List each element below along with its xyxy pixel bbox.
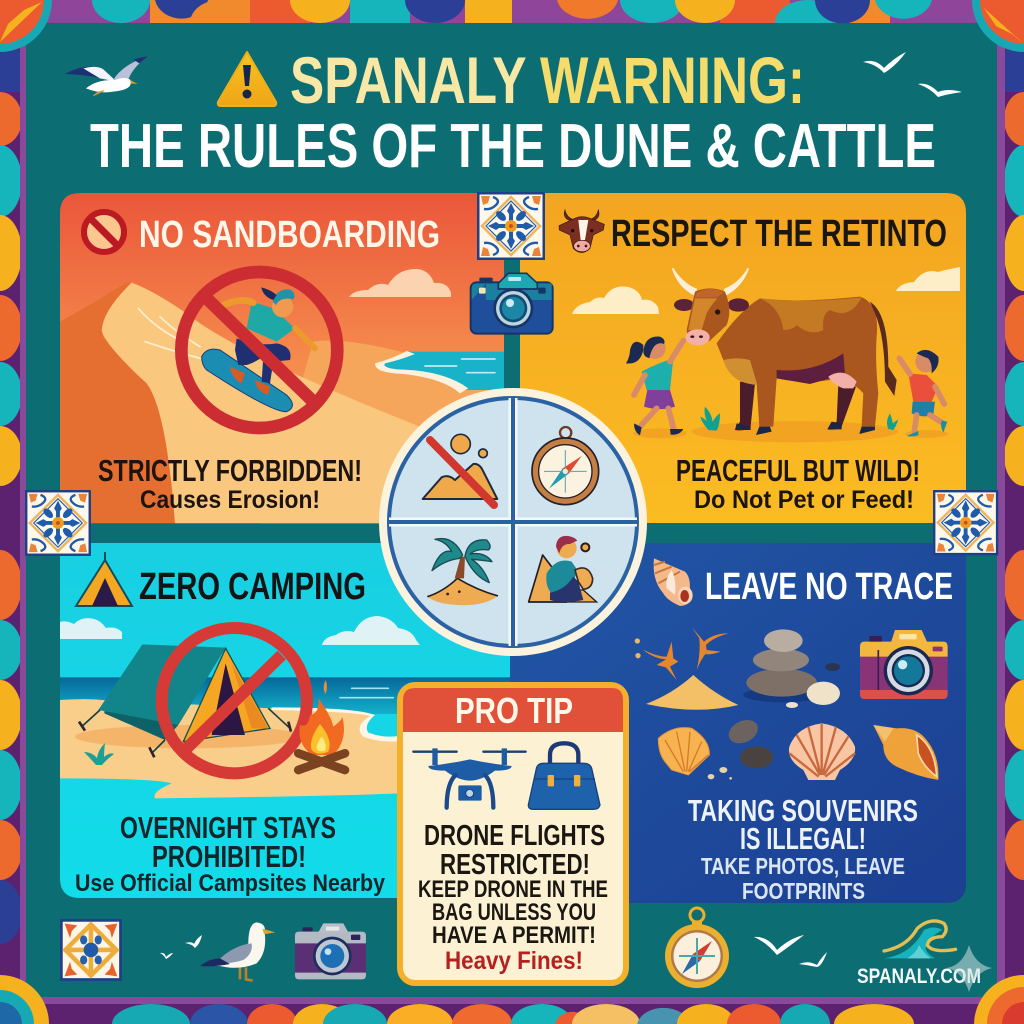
icon: warning triangle — [218, 52, 276, 106]
icon: campfire — [298, 680, 345, 770]
panel text: TAKING SOUVENIRS — [688, 793, 918, 828]
icon: no-entry circle — [84, 212, 124, 252]
icon: person on dune quadrant — [529, 536, 597, 602]
panel text: TAKE PHOTOS, LEAVE — [701, 853, 905, 879]
panel text: IS ILLEGAL! — [740, 821, 866, 856]
icon: compass quadrant — [532, 427, 599, 505]
pro tip text: BAG UNLESS YOU — [432, 899, 596, 926]
illustration: boy — [899, 350, 947, 437]
icon: standing seagull — [200, 922, 275, 981]
central four-part badge — [379, 388, 647, 656]
icon: palm island quadrant — [427, 539, 498, 605]
panel text — [676, 453, 920, 514]
icon: clouds — [60, 616, 420, 645]
illustration: scallop shell — [658, 728, 709, 775]
heading: ZERO CAMPING — [139, 566, 366, 608]
title: SPANALY WARNING: — [290, 43, 805, 117]
icon: spiral shell — [654, 558, 693, 606]
illustration: tent and no-camping sign — [75, 628, 307, 773]
icon: camera top centre — [471, 273, 553, 334]
pro tip text — [418, 820, 608, 975]
pro tip text: Heavy Fines! — [445, 947, 583, 975]
icon: compass bottom — [665, 908, 729, 988]
icon: small seagulls — [160, 935, 202, 959]
panel: pro tip — [400, 685, 626, 983]
decorative tile: bottom left — [60, 919, 122, 981]
panel text: PEACEFUL BUT WILD! — [676, 453, 920, 488]
panel text: Do Not Pet or Feed! — [694, 486, 914, 514]
panel text: PROHIBITED! — [152, 839, 306, 874]
icon: clouds — [572, 267, 960, 314]
panel: respect the retinto — [510, 193, 966, 523]
icon: seagulls top right — [863, 52, 962, 97]
icon: camera bottom left — [295, 923, 366, 979]
illustration: sand pile with starfish — [635, 627, 738, 710]
panel text — [75, 810, 386, 897]
panel: leave no trace — [510, 543, 966, 904]
illustration: sandboarder prohibited — [181, 272, 337, 428]
icon: prohibition sign — [162, 628, 307, 773]
icon: cow head — [559, 210, 604, 252]
icon: sparkle — [947, 945, 992, 992]
illustration: large scallop shell — [789, 723, 855, 780]
pro tip heading: PRO TIP — [455, 690, 573, 731]
icon: wave — [884, 921, 956, 958]
icon: bag — [528, 743, 600, 809]
icon: grass — [84, 743, 114, 765]
icon: camera — [860, 630, 948, 699]
logo: spanaly.com — [857, 921, 981, 988]
icon: no-dune quadrant — [423, 434, 497, 505]
illustration: retinto cow — [633, 268, 948, 442]
panel: no sandboarding — [60, 193, 510, 523]
panel text: Use Official Campsites Nearby — [75, 870, 386, 897]
panel text: OVERNIGHT STAYS — [120, 810, 336, 845]
pro tip text: RESTRICTED! — [440, 849, 590, 881]
panel text: Causes Erosion! — [140, 486, 320, 514]
title — [90, 43, 936, 181]
panel text: FOOTPRINTS — [742, 878, 865, 904]
panel: zero camping — [60, 543, 515, 898]
icon: small tent — [76, 552, 132, 606]
text: domain: SPANALY.COM — [857, 965, 981, 988]
illustration: sand dune and sea — [60, 283, 505, 523]
vertical teal divider — [504, 258, 520, 403]
pro tip header — [403, 688, 623, 732]
icon: cloud — [349, 269, 451, 297]
illustration: conch shell — [873, 725, 938, 780]
pro tip text: DRONE FLIGHTS — [424, 820, 605, 852]
illustration: girl — [626, 337, 683, 435]
illustration: stacked stones — [743, 629, 840, 708]
illustration: pebbles — [708, 716, 773, 780]
panel text — [688, 793, 918, 904]
pro tip text: HAVE A PERMIT! — [432, 922, 596, 949]
icon: grass tufts — [701, 407, 898, 431]
decorative tile: right — [933, 490, 998, 555]
decorative tile: top centre — [477, 192, 545, 260]
icon: drone — [413, 748, 526, 808]
icon: flying seagull top left — [65, 56, 148, 96]
heading: NO SANDBOARDING — [139, 214, 440, 256]
illustration: sea and beach — [60, 677, 515, 798]
decorative tile: left — [25, 490, 91, 556]
panel text: STRICTLY FORBIDDEN! — [98, 453, 362, 488]
icon: prohibition sign — [181, 272, 337, 428]
panel text — [98, 453, 362, 514]
icon: birds bottom right — [754, 935, 827, 967]
pro tip text: KEEP DRONE IN THE — [418, 876, 608, 903]
